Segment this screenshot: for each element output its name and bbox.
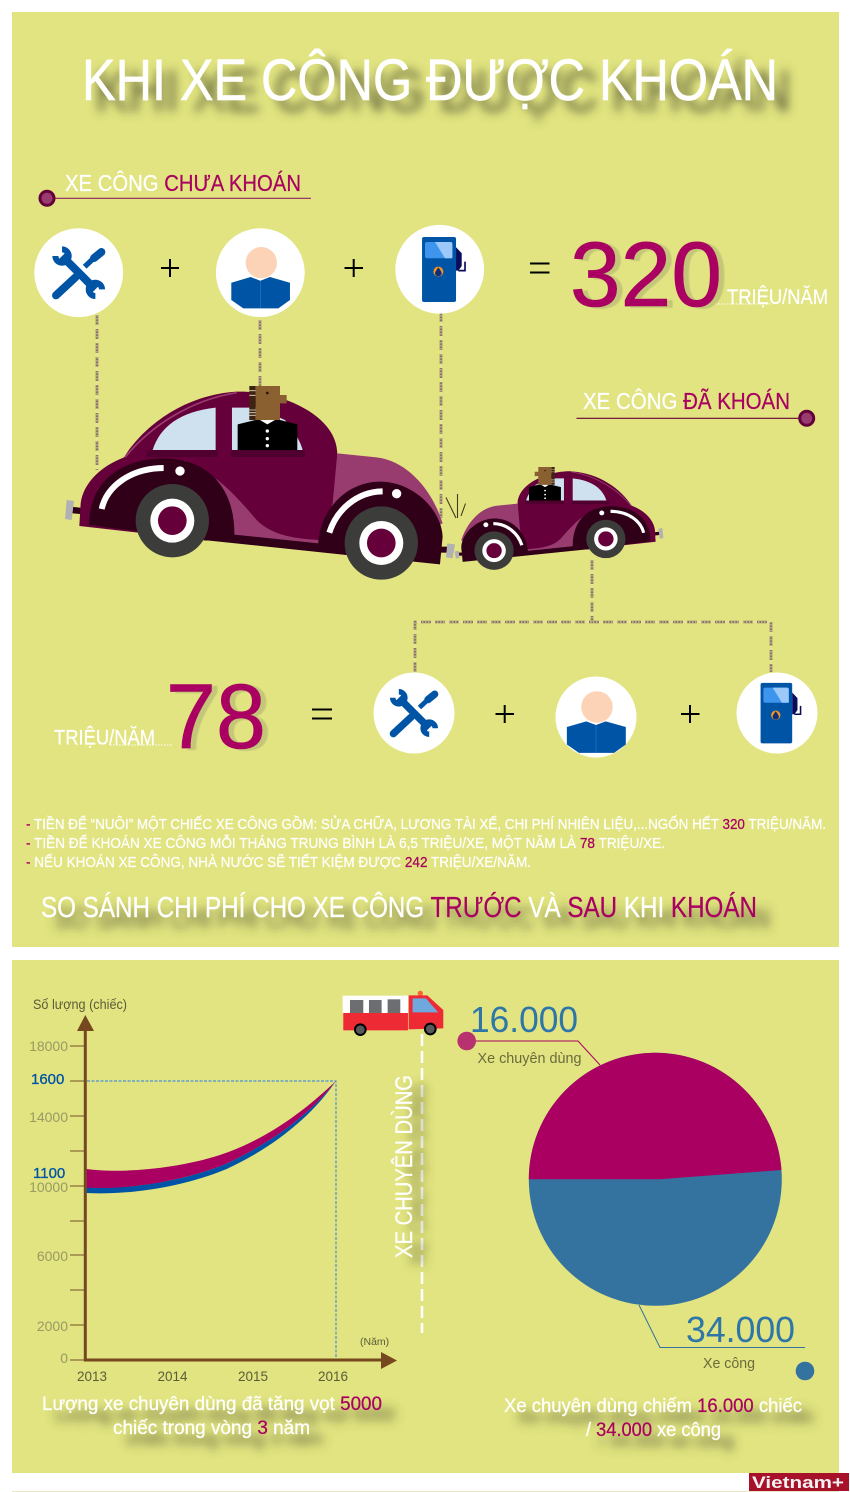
icon: driver xyxy=(556,676,636,758)
heading: after contract: XE CÔNG ĐÃ KHOÁN xyxy=(583,387,790,414)
connector lines from small car to lower icons xyxy=(415,560,771,672)
figure: 78 per year: TRIỆU/NĂM xyxy=(54,726,155,750)
x axis labels: 2014 xyxy=(158,1369,188,1384)
y axis title: Số lượng (chiếc) xyxy=(33,996,127,1012)
section heading: cost comparison: SO SÁNH CHI PHÍ CHO XE CÔNG TRƯỚC VÀ SAU KHI KHOÁN xyxy=(41,890,757,924)
icon: repair tools xyxy=(34,228,123,317)
collision marks xyxy=(446,494,466,518)
y axis labels xyxy=(29,1038,68,1366)
vertical dashed marker xyxy=(421,1034,423,1333)
figure: 78 per year: 78 xyxy=(166,666,266,768)
small car xyxy=(455,467,663,570)
pie chart xyxy=(529,1053,782,1306)
heading: before contract xyxy=(40,169,311,205)
highlighted values: 1100 xyxy=(33,1165,65,1182)
icon: driver xyxy=(216,228,305,317)
pie caption: Xe chuyên dùng chiếm 16.000 chiếc xyxy=(504,1396,802,1417)
plus xyxy=(496,705,514,723)
y axis labels: 6000 xyxy=(37,1248,68,1264)
x axis labels xyxy=(77,1369,348,1384)
legend: specialised vehicles: Xe chuyên dùng xyxy=(478,1050,582,1067)
notes text block: - TIỀN ĐỂ “NUÔI” MỘT CHIẾC XE CÔNG GỒM: SỬA CHỮA, LƯƠNG TÀI XẾ, CHI PHÍ NHIÊN LIỆU,...NGỐN HẾT 320 TRIỆU/NĂM. xyxy=(26,815,826,833)
legend: public vehicles: 34.000 xyxy=(686,1309,795,1350)
notes text block: - TIỀN ĐỂ KHOÁN XE CÔNG MỖI THÁNG TRUNG BÌNH LÀ 6,5 TRIỆU/XE, MỘT NĂM LÀ 78 TRIỆU/XE. xyxy=(26,834,665,852)
plus xyxy=(161,259,179,277)
chart caption xyxy=(42,1394,382,1439)
highlighted values xyxy=(31,1071,65,1182)
pie caption: / 34.000 xe công xyxy=(586,1420,721,1441)
figure: 320 per year xyxy=(570,224,828,326)
icon: repair tools xyxy=(374,672,454,754)
highlighted values: 1600 xyxy=(31,1071,64,1088)
equals xyxy=(530,264,550,272)
notes text block: - NẾU KHOÁN XE CÔNG, NHÀ NƯỚC SẼ TIẾT KIỆM ĐƯỢC 242 TRIỆU/XE/NĂM. xyxy=(26,854,531,871)
x axis labels: 2016 xyxy=(318,1369,348,1384)
growth curve xyxy=(87,1081,336,1193)
notes text block xyxy=(26,815,826,871)
heading: after contract xyxy=(576,387,814,425)
y axis labels: 14000 xyxy=(29,1109,68,1125)
axes xyxy=(77,1015,397,1369)
y axis labels: 10000 xyxy=(29,1179,68,1195)
big car xyxy=(65,386,455,580)
icon: fuel pump xyxy=(395,225,484,314)
legend: public vehicles: Xe công xyxy=(703,1355,755,1372)
figure: 320 per year: 320 xyxy=(570,224,722,326)
legend: specialised vehicles: 16.000 xyxy=(470,999,578,1040)
icon: truck xyxy=(343,991,443,1035)
logo: Vietnam+ xyxy=(749,1473,849,1492)
plus xyxy=(681,705,700,723)
panel: bottom charts xyxy=(12,960,839,1473)
pie caption xyxy=(504,1396,802,1441)
logo: Vietnam+: Vietnam+ xyxy=(752,1474,844,1492)
vertical label: XE CHUYÊN DÙNG xyxy=(391,1075,418,1258)
figure: 320 per year: TRIỆU/NĂM xyxy=(727,286,828,309)
x axis title: (Năm) xyxy=(360,1336,389,1348)
panel: top comparison xyxy=(12,12,839,947)
y axis labels: 2000 xyxy=(37,1318,68,1334)
y axis labels: 18000 xyxy=(29,1038,68,1054)
equals xyxy=(312,710,332,718)
heading: before contract: XE CÔNG CHƯA KHOÁN xyxy=(65,169,301,196)
icon: fuel pump xyxy=(736,672,818,754)
guide lines xyxy=(87,1081,336,1360)
chart caption: Lượng xe chuyên dùng đã tăng vọt 5000 xyxy=(42,1394,382,1415)
y axis labels: 0 xyxy=(60,1350,68,1366)
legend: specialised vehicles xyxy=(457,999,600,1067)
x axis labels: 2015 xyxy=(238,1369,268,1384)
legend: public vehicles xyxy=(639,1305,814,1380)
axis ticks xyxy=(70,1046,85,1360)
x axis labels: 2013 xyxy=(77,1369,107,1384)
figure: 78 per year xyxy=(54,666,266,768)
chart caption: chiếc trong vòng 3 năm xyxy=(113,1418,310,1439)
plus xyxy=(344,259,363,277)
line chart xyxy=(29,996,397,1384)
connector lines from top icons to big car xyxy=(97,312,441,522)
